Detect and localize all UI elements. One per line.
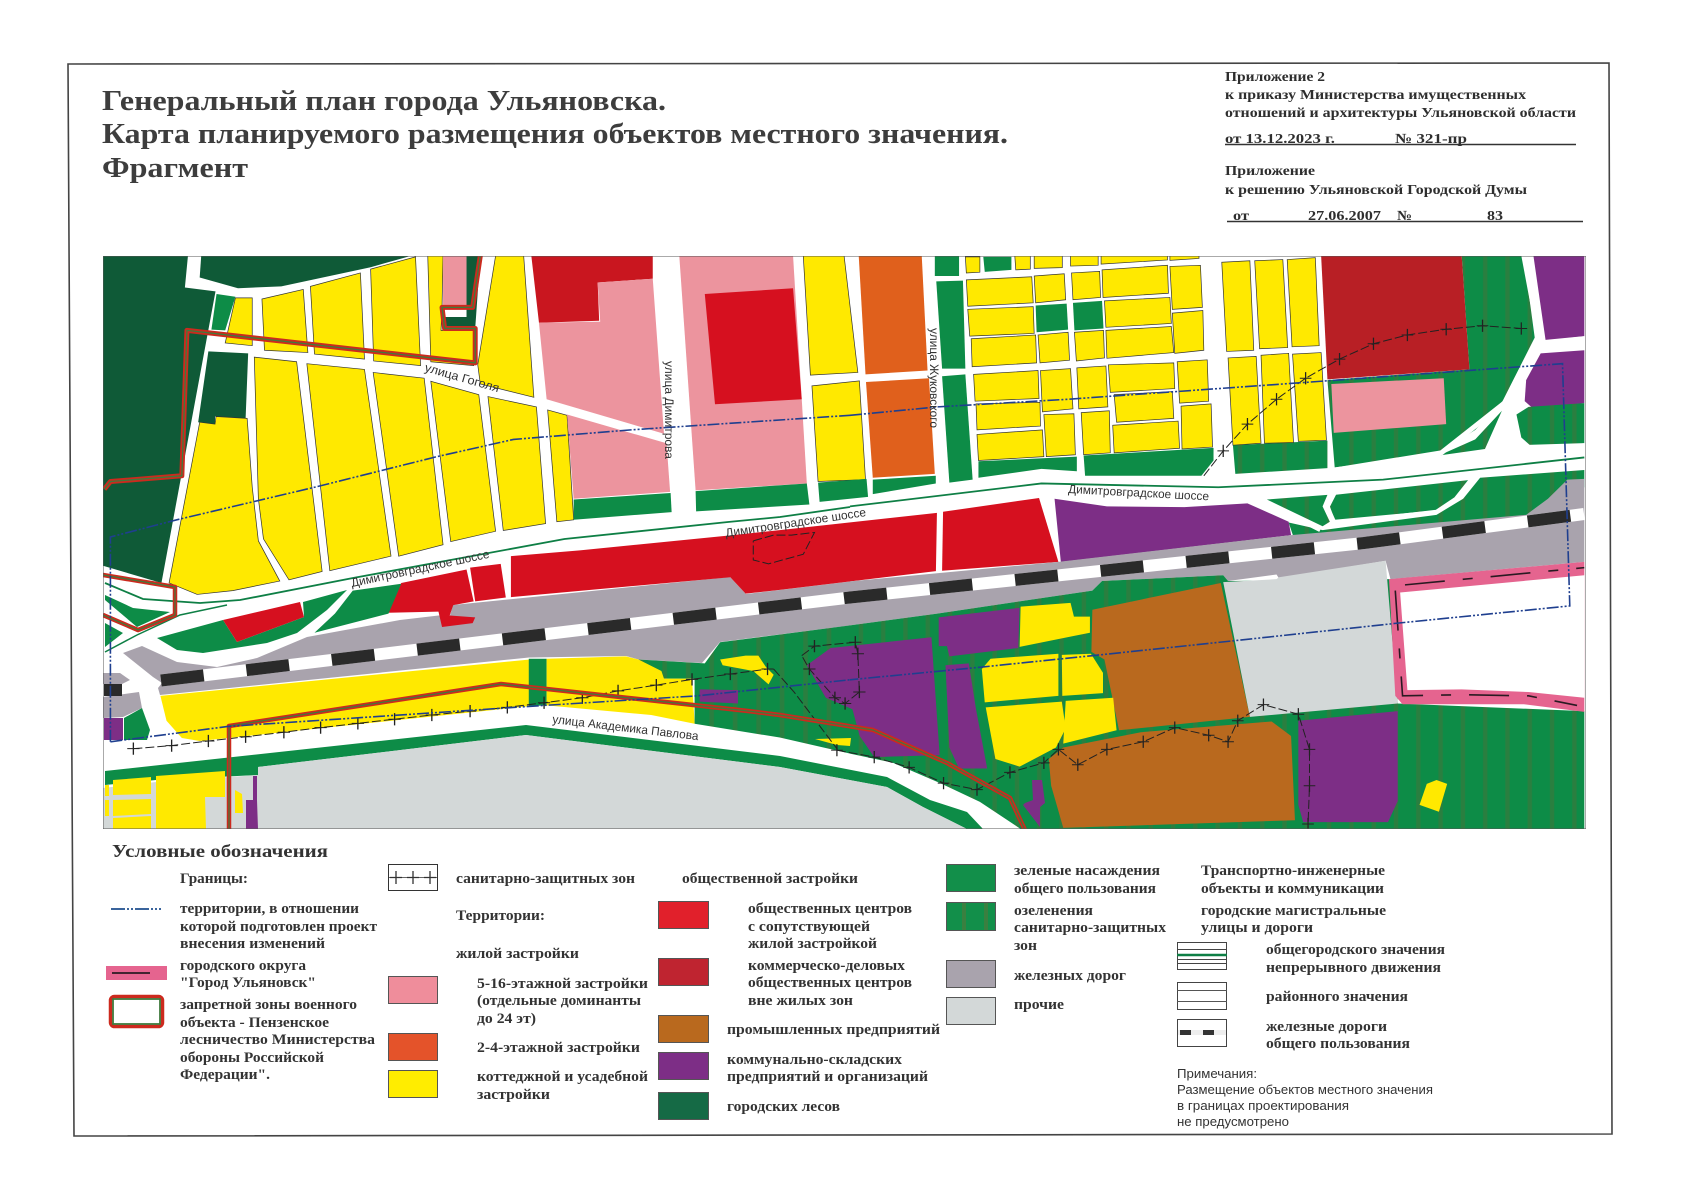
legend column: transport: Транспортно-инженерные (1201, 863, 1386, 879)
legend column: sanitary zones and residential territories: жилой застройки (456, 946, 579, 962)
legend column: sanitary zones and residential territories: до 24 эт) (477, 1011, 536, 1027)
project territory boundary (110, 364, 1570, 742)
railway land west part (123, 577, 850, 695)
icon: sanitary zone crosses (388, 864, 438, 890)
title: Фрагмент (102, 152, 248, 184)
approval block: decision of the City Duma: 83 (1487, 209, 1503, 224)
legend column: boundaries: объекта - Пензенское (180, 1015, 330, 1031)
swatch: public centres (658, 902, 708, 928)
legend column: boundaries: "Город Ульяновск" (180, 975, 316, 991)
legend column: public buildings, industry, forests: общественных центров (748, 901, 912, 917)
street labels: улица Димитрова (662, 361, 676, 459)
legend heading: Условные обозначения (112, 841, 328, 861)
street labels: улица Гоголя (423, 360, 501, 395)
legend column: boundaries: Границы: (180, 871, 248, 887)
approval block: order of the Ministry: Приложение 2 (1225, 70, 1325, 85)
icon: city district boundary (106, 966, 167, 980)
legend column: boundaries: городского округа (180, 958, 307, 974)
approval block: decision of the City Duma: № (1397, 209, 1412, 224)
legend column: sanitary zones and residential territories: санитарно-защитных зон (456, 871, 635, 887)
legend column: sanitary zones and residential territories: 5-16-этажной застройки (477, 976, 648, 992)
legend column: public buildings, industry, forests: общественных центров (748, 975, 912, 991)
legend column: boundaries: запретной зоны военного (180, 997, 357, 1013)
legend column: boundaries: территории, в отношении (180, 901, 359, 917)
military zone boundary (103, 256, 1025, 830)
legend column: transport: объекты и коммуникации (1201, 881, 1384, 897)
legend column: green spaces and other: зон (1014, 938, 1037, 954)
legend column: transport: районного значения (1266, 989, 1408, 1005)
legend column: green spaces and other: санитарно-защитных (1014, 920, 1167, 936)
title: Генеральный план города Ульяновска. (102, 85, 666, 117)
legend column: green spaces and other: железных дорог (1014, 968, 1126, 984)
legend column: public buildings, industry, forests: городских лесов (727, 1099, 840, 1115)
legend column: transport: железные дороги (1266, 1019, 1387, 1035)
approval block: order of the Ministry: отношений и архитектуры Ульяновской области (1225, 106, 1576, 121)
approval block: order of the Ministry: к приказу Министерства имущественных (1225, 88, 1526, 103)
railway (104, 514, 1584, 696)
legend column: public buildings, industry, forests: коммунально-складских (727, 1052, 903, 1068)
approval block: decision of the City Duma (1225, 164, 1583, 224)
icon: district road (1177, 982, 1227, 1010)
legend column: transport (1177, 863, 1445, 1052)
approval block: decision of the City Duma: к решению Ульяновской Городской Думы (1225, 183, 1527, 198)
legend column: sanitary zones and residential territories (388, 864, 648, 1103)
legend column: boundaries: внесения изменений (180, 936, 325, 952)
legend column: sanitary zones and residential territories: Территории: (456, 908, 545, 924)
legend column: public buildings, industry, forests: жилой застройкой (748, 936, 877, 952)
legend column: green spaces and other: общего пользования (1014, 881, 1156, 897)
legend column: sanitary zones and residential territories: (отдельные доминанты (477, 993, 641, 1009)
legend column: public buildings, industry, forests: коммерческо-деловых (748, 958, 906, 974)
legend column: sanitary zones and residential territories: 2-4-этажной застройки (477, 1040, 640, 1056)
street labels: Димитровградское шоссе (350, 547, 491, 590)
swatch: 2-4 storey (388, 1034, 438, 1060)
approval block: order of the Ministry (1225, 70, 1576, 147)
notes: не предусмотрено (1177, 1114, 1289, 1129)
icon: military zone boundary (110, 996, 162, 1026)
legend column: boundaries: которой подготовлен проект (180, 919, 377, 935)
legend column: public buildings, industry, forests: предприятий и организаций (727, 1069, 928, 1085)
notes (1177, 1066, 1433, 1129)
sanitary protection zone lines with crosses (133, 326, 1521, 824)
legend column: green spaces and other (946, 863, 1167, 1024)
legend column: transport: общего пользования (1266, 1036, 1410, 1052)
title (102, 85, 1008, 184)
notes: Примечания: (1177, 1066, 1257, 1081)
notes: в границах проектирования (1177, 1098, 1349, 1113)
swatch: commercial centres (658, 958, 708, 986)
swatch: warehouses (658, 1052, 708, 1080)
legend column: boundaries: обороны Российской (180, 1050, 324, 1066)
legend column: sanitary zones and residential territories: застройки (477, 1087, 550, 1103)
street labels (350, 328, 1210, 743)
street labels: улица Академика Павлова (552, 712, 700, 743)
approval block: decision of the City Duma: 27.06.2007 (1308, 209, 1381, 224)
icon: railway (1178, 1020, 1226, 1046)
legend column: transport: общегородского значения (1266, 942, 1445, 958)
swatch: city forests (658, 1092, 708, 1120)
legend column: public buildings, industry, forests: общественной застройки (682, 871, 858, 887)
legend column: boundaries: Федерации". (180, 1067, 270, 1083)
street labels: улица Жуковского (927, 328, 941, 428)
swatch: cottage (388, 1070, 438, 1098)
swatch: industry (658, 1016, 708, 1042)
approval block: decision of the City Duma: Приложение (1225, 164, 1315, 179)
swatch: railways (946, 960, 996, 988)
title: Карта планируемого размещения объектов местного значения. (102, 118, 1008, 150)
map blocks west part (103, 256, 937, 754)
approval block: order of the Ministry: № 321-пр (1395, 132, 1467, 147)
approval block: decision of the City Duma: от (1233, 209, 1249, 224)
map blocks east part (807, 256, 1584, 829)
street labels: Димитровградское шоссе (724, 505, 867, 540)
swatch: other (946, 998, 996, 1024)
legend column: transport: улицы и дороги (1201, 920, 1313, 936)
panel: map (103, 256, 1586, 830)
swatch: public green (946, 864, 996, 892)
road junctions (1310, 294, 1584, 532)
swatch: 5-16 storey (388, 976, 438, 1004)
legend column: public buildings, industry, forests (658, 871, 940, 1120)
icon: project territory line (111, 908, 161, 910)
legend column: transport: непрерывного движения (1266, 960, 1441, 976)
junction and south road blocks (103, 590, 1045, 829)
legend column: transport: городские магистральные (1201, 903, 1387, 919)
approval block: order of the Ministry: от 13.12.2023 г. (1225, 132, 1335, 147)
legend column: public buildings, industry, forests: промышленных предприятий (727, 1022, 940, 1038)
legend column: green spaces and other: прочие (1014, 997, 1065, 1013)
legend column: green spaces and other: зеленые насаждения (1014, 863, 1160, 879)
legend column: green spaces and other: озеленения (1014, 903, 1093, 919)
legend column: boundaries (106, 871, 377, 1083)
notes: Размещение объектов местного значения (1177, 1082, 1433, 1097)
highway centre lines (105, 457, 1584, 652)
legend column: public buildings, industry, forests: вне жилых зон (748, 993, 853, 1009)
street labels: Димитровградское шоссе (1068, 482, 1210, 503)
legend column: public buildings, industry, forests: с сопутствующей (748, 919, 870, 935)
legend column: boundaries: лесничество Министерства (180, 1032, 376, 1048)
icon: city road (1177, 942, 1227, 970)
legend column: sanitary zones and residential territories: коттеджной и усадебной (477, 1069, 648, 1085)
swatch: sanitary green (946, 902, 996, 930)
